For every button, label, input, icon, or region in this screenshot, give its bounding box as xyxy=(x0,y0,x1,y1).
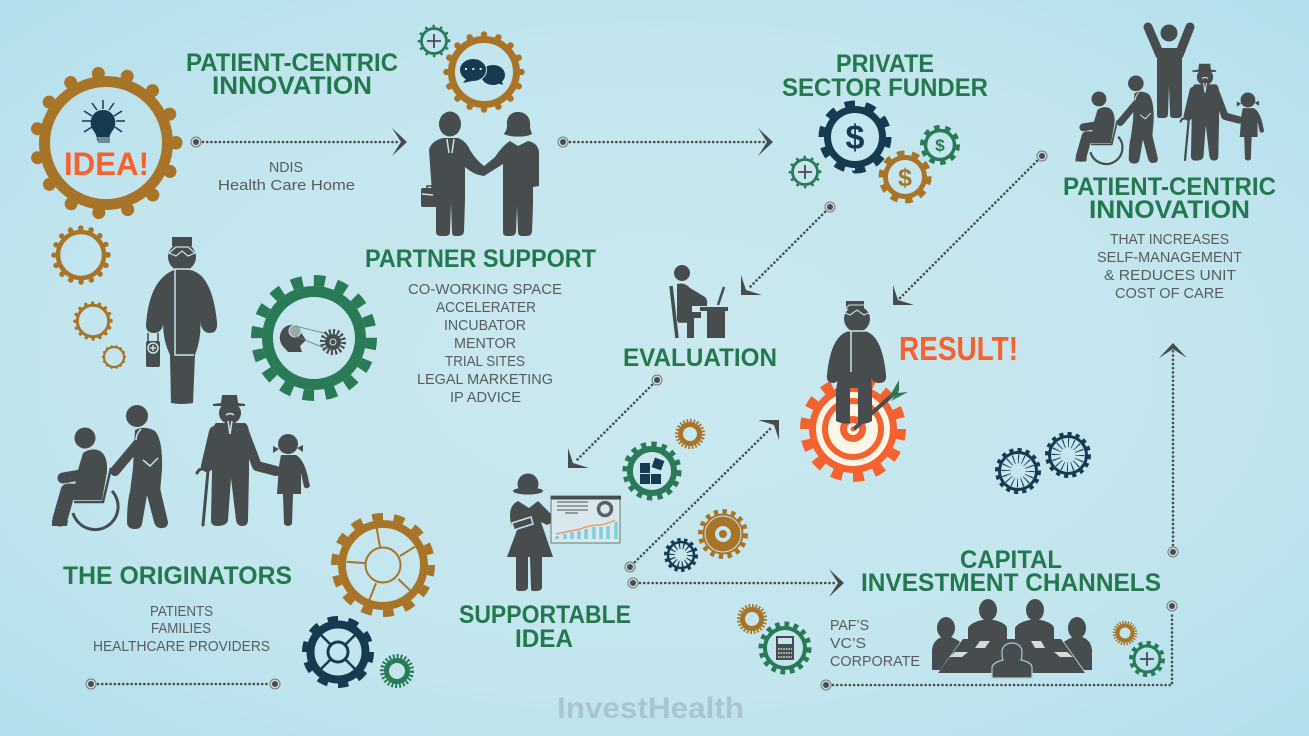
text: partner list: ACCELERATER xyxy=(436,299,536,316)
text: originators list xyxy=(93,603,270,655)
heading: patient-centric innovation xyxy=(186,49,398,100)
text: innovation description: SELF-MANAGEMENT xyxy=(1097,249,1242,266)
icon: head with gears xyxy=(280,325,344,352)
icon: medical bag xyxy=(146,333,160,367)
dotted line: capital loop xyxy=(821,601,1177,690)
icon: puzzle xyxy=(640,458,664,484)
arrow: partner to funder xyxy=(558,128,773,156)
arrow: evaluation to idea xyxy=(568,375,662,468)
figure: doctor on target xyxy=(827,301,886,424)
heading: private sector funder xyxy=(782,50,988,102)
text: capital list: VC’S xyxy=(830,635,866,652)
gears: lower left xyxy=(305,516,432,686)
text: capital list xyxy=(830,617,920,670)
heading: supportable idea xyxy=(459,601,631,653)
heading: result: RESULT! xyxy=(899,330,1018,367)
text: partner list: IP ADVICE xyxy=(450,389,521,406)
figures: boardroom table xyxy=(932,599,1092,678)
figure: evaluation at desk xyxy=(671,265,728,338)
text: capital list: PAF’S xyxy=(830,617,869,634)
arrow: funder to evaluation xyxy=(741,202,835,295)
heading: patient-centric innovation 2: INNOVATION xyxy=(1089,196,1250,224)
text: innovation description: THAT INCREASES xyxy=(1110,231,1229,248)
icon: dart xyxy=(854,380,908,429)
heading: evaluation: EVALUATION xyxy=(623,344,777,372)
text: innovation description: COST OF CARE xyxy=(1115,285,1224,302)
text: ndis: NDIS xyxy=(269,159,303,176)
text: ndis: Health Care Home xyxy=(218,177,355,194)
gears: navy pair xyxy=(998,434,1088,492)
figure: presenter with screen xyxy=(507,474,621,591)
icon: speech bubbles xyxy=(460,58,505,85)
text: partner list: CO-WORKING SPACE xyxy=(408,281,562,298)
text: partner list: INCUBATOR xyxy=(444,317,526,334)
heading: private sector funder: PRIVATE xyxy=(836,50,934,78)
heading: partner support: PARTNER SUPPORT xyxy=(365,245,596,273)
icon: briefcase xyxy=(421,186,437,207)
gears: dollars: $ xyxy=(898,164,912,192)
text: ndis xyxy=(218,159,355,194)
thought gears xyxy=(54,228,125,368)
dotted line: originators xyxy=(86,679,280,689)
heading: supportable idea: IDEA xyxy=(515,625,573,653)
gear: idea xyxy=(36,73,176,213)
arrow: idea to result xyxy=(625,420,779,572)
figures: the originators xyxy=(52,395,310,530)
heading: capital investment channels: CAPITAL xyxy=(960,546,1062,574)
gears: dollars: $ xyxy=(935,136,945,155)
text: originators list: FAMILIES xyxy=(151,620,211,637)
text: innovation description: & REDUCES UNIT xyxy=(1104,267,1236,284)
text: originators list: PATIENTS xyxy=(150,603,213,620)
arrow: idea to partner xyxy=(191,128,407,156)
heading: capital investment channels: INVESTMENT CHANNELS xyxy=(861,569,1161,597)
logo text: InvestHealth xyxy=(557,692,744,725)
text: partner list: LEGAL MARKETING xyxy=(417,371,553,388)
gears: plus xyxy=(1115,623,1163,675)
heading: patient-centric innovation 2 xyxy=(1063,173,1276,224)
gear: brain xyxy=(256,280,372,396)
text: partner list: MENTOR xyxy=(454,335,516,352)
icon: light bulb xyxy=(82,100,125,143)
heading: patient-centric innovation: INNOVATION xyxy=(212,72,372,100)
figures: celebrating group xyxy=(1076,24,1264,164)
arrow: idea to capital xyxy=(628,569,844,597)
heading: patient-centric innovation: PATIENT-CENTRIC xyxy=(186,49,398,77)
text: capital list: CORPORATE xyxy=(830,653,920,670)
figure: doctor xyxy=(146,237,217,404)
arrow: innovation to result xyxy=(893,151,1047,305)
idea label: IDEA! xyxy=(64,146,149,182)
gears: dollars xyxy=(790,104,958,201)
text: partner list: TRIAL SITES xyxy=(445,353,525,370)
text: originators list: HEALTHCARE PROVIDERS xyxy=(93,638,270,655)
figures: partners shaking hands xyxy=(421,112,539,236)
gears: puzzle and friends xyxy=(626,422,746,570)
chart: presentation screen xyxy=(551,496,621,543)
gear: small orange xyxy=(740,606,764,632)
heading: patient-centric innovation 2: PATIENT-CENTRIC xyxy=(1063,173,1276,201)
arrow: capital up to innovation xyxy=(1159,343,1187,557)
text: innovation description xyxy=(1097,231,1242,302)
gear: calculator xyxy=(762,624,808,672)
heading: the originators: THE ORIGINATORS xyxy=(63,562,292,590)
text: partner list xyxy=(408,281,562,406)
heading: private sector funder: SECTOR FUNDER xyxy=(782,74,988,102)
gears: chat and plus xyxy=(419,26,522,110)
heading: supportable idea: SUPPORTABLE xyxy=(459,601,631,629)
gear: target xyxy=(806,382,900,476)
gears: dollars: $ xyxy=(846,119,865,157)
heading: capital investment channels xyxy=(861,546,1161,597)
